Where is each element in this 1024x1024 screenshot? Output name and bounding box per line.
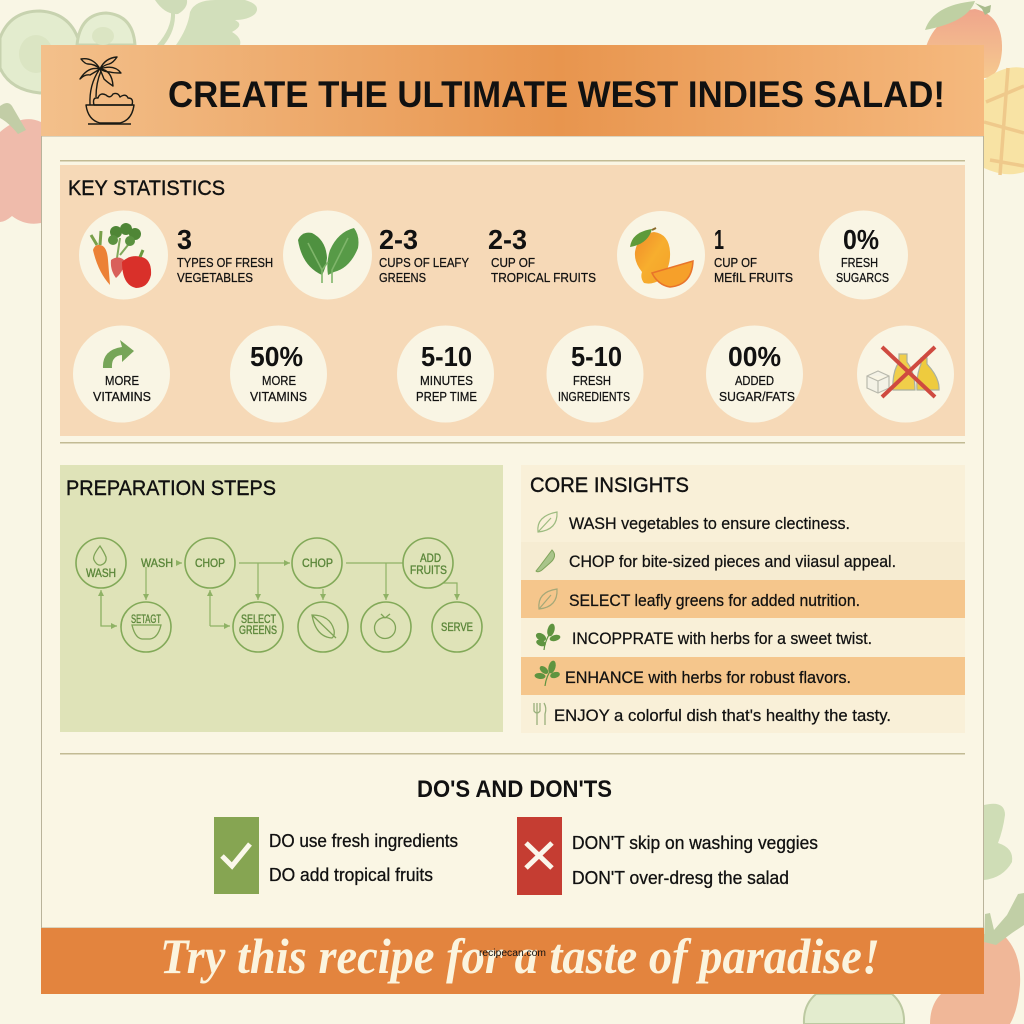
stat: 5-10 fresh ingredients: FRESH [573,373,611,388]
stat: 00% added sugar/fats: ADDED [735,373,774,388]
step: add fruits: ADD [420,551,441,565]
insight: wash: WASH vegetables to ensure clectiness. [569,514,850,533]
step: tomato [361,602,411,652]
insight: chop: CHOP for bite-sized pieces and viiasul appeal. [569,552,896,571]
decoration: cut mango right [984,67,1024,175]
stat: more vitamins with arrow: MORE [105,373,139,388]
stat: 3 types of fresh vegetables: VEGETABLES [177,270,253,285]
step: wash with water drop: WASH [86,566,116,580]
stat: 0% fresh sugars [819,210,908,300]
decoration: cucumber bottom [804,994,904,1024]
stat: 50% more vitamins: VITAMINS [250,389,307,404]
step: add fruits: FRUITS [410,563,447,577]
stat: more vitamins with arrow [73,326,170,422]
stat: 5-10 minutes prep time: 5-10 [421,341,472,372]
divider [60,160,965,162]
heading: preparation steps: PREPARATION STEPS [66,477,276,500]
stat: 50% more vitamins: 50% [250,341,303,372]
stat: 5-10 minutes prep time [397,326,494,422]
section: do's and don'ts [214,776,818,895]
stat: 5-10 fresh ingredients [546,326,644,422]
don't list: DON'T skip on washing veggies [572,833,818,853]
icon: no sugar or oil [857,326,954,422]
decoration: leaf top [155,0,257,45]
stat: mango icon and 1 cup of fruits: 1 [714,224,724,255]
insight: select: SELECT leafly greens for added nutrition. [569,591,860,610]
insight: enhance [534,660,851,687]
stat: 50% more vitamins: MORE [262,373,296,388]
stat: 2-3 cup of tropical fruits: TROPICAL FRUITS [491,270,596,285]
stat: 0% fresh sugars: 0% [843,224,879,255]
icon: red cross [517,817,562,895]
main panel body [42,136,984,928]
heading: core insights: CORE INSIGHTS [530,474,689,497]
step: serve: SERVE [441,620,473,634]
divider [60,442,965,444]
decoration: mango top right [925,1,1002,78]
step: chop: CHOP [195,556,225,570]
step: serve [432,602,482,652]
stat: 00% added sugar/fats [706,326,803,422]
panel: core insights [521,465,965,733]
panel: key statistics [60,165,965,436]
stat: more vitamins with arrow: VITAMINS [93,389,151,404]
decoration: carrot bottom right [930,893,1024,1024]
do list: DO use fresh ingredients [269,831,458,851]
stat: 0% fresh sugars: SUGARCS [836,270,889,285]
icon: green check [214,817,259,894]
enhance text: ENHANCE with herbs for robust flavors. [565,668,851,687]
step: select greens: SELECT [241,612,276,626]
title banner [41,45,984,136]
step: select greens [233,602,283,652]
stat: 50% more vitamins [230,326,327,422]
step: chop second [292,538,342,588]
insight: enjoy: ENJOY a colorful dish that's healthy the tasty. [554,706,891,725]
stat: mango icon and 1 cup of fruits: MEfIL FRUITS [714,270,793,285]
stat: 5-10 minutes prep time: MINUTES [420,373,473,388]
stat: 5-10 fresh ingredients: INGREDIENTS [558,389,630,404]
title text: CREATE THE ULTIMATE WEST INDIES SALAD! [168,74,945,115]
insight: incorporate [534,623,872,650]
decoration: leaf bottom right [984,804,1012,880]
heading: do's and don'ts: DO'S AND DON'TS [417,776,612,803]
stat: 2-3 cups of leafy greens: CUPS OF LEAFY [379,255,469,270]
stat: 2-3 cups of leafy greens: GREENS [379,270,426,285]
footer tagline: Try this recipe for a taste of paradise! [160,928,880,984]
stat: mango icon and 1 cup of fruits: CUP OF [714,255,757,270]
step: leaf [298,602,348,652]
stat: 5-10 fresh ingredients: 5-10 [571,341,622,372]
stat: 2-3 cups of leafy greens [283,210,469,300]
step: chop [185,538,235,588]
don't list: DON'T over-dresg the salad [572,868,789,888]
do list: DO add tropical fruits [269,865,433,885]
don't list [572,833,818,888]
stat: 2-3 cup of tropical fruits: CUP OF [491,255,535,270]
stat: 00% added sugar/fats: SUGAR/FATS [719,389,795,404]
stat: 00% added sugar/fats: 00% [728,341,781,372]
step: select bowl [121,602,171,652]
step label: wash: WASH [141,556,173,570]
footer banner [41,928,984,994]
step: select bowl: SETAGT [131,612,161,626]
step: chop second: CHOP [302,556,333,570]
stat: 3 types of fresh vegetables [79,210,273,300]
stat: 3 types of fresh vegetables: 3 [177,224,192,255]
heading: key statistics: KEY STATISTICS [68,177,225,200]
decoration: red pepper left [0,103,41,224]
stat: 3 types of fresh vegetables: TYPES OF FRESH [177,255,273,270]
step: wash with water drop [76,538,126,588]
stat: 2-3 cup of tropical fruits [488,224,596,285]
watermark: recipecan.com [479,948,546,959]
stat: 0% fresh sugars: FRESH [841,255,878,270]
decoration: cucumber slices top left [0,11,135,93]
do list [269,831,458,885]
panel: preparation steps [60,465,503,732]
stat: 5-10 minutes prep time: PREP TIME [416,389,477,404]
incorporate text: INCOPPRATE with herbs for a sweet twist. [572,629,872,648]
stat: 2-3 cup of tropical fruits: 2-3 [488,224,527,255]
step: add fruits [403,538,453,588]
divider [60,753,965,754]
stat: mango icon and 1 cup of fruits [617,211,793,299]
icon: palm tree and salad bowl [80,57,134,124]
stat: 2-3 cups of leafy greens: 2-3 [379,224,418,255]
flow arrows [101,563,457,626]
step: select greens: GREENS [239,623,277,637]
